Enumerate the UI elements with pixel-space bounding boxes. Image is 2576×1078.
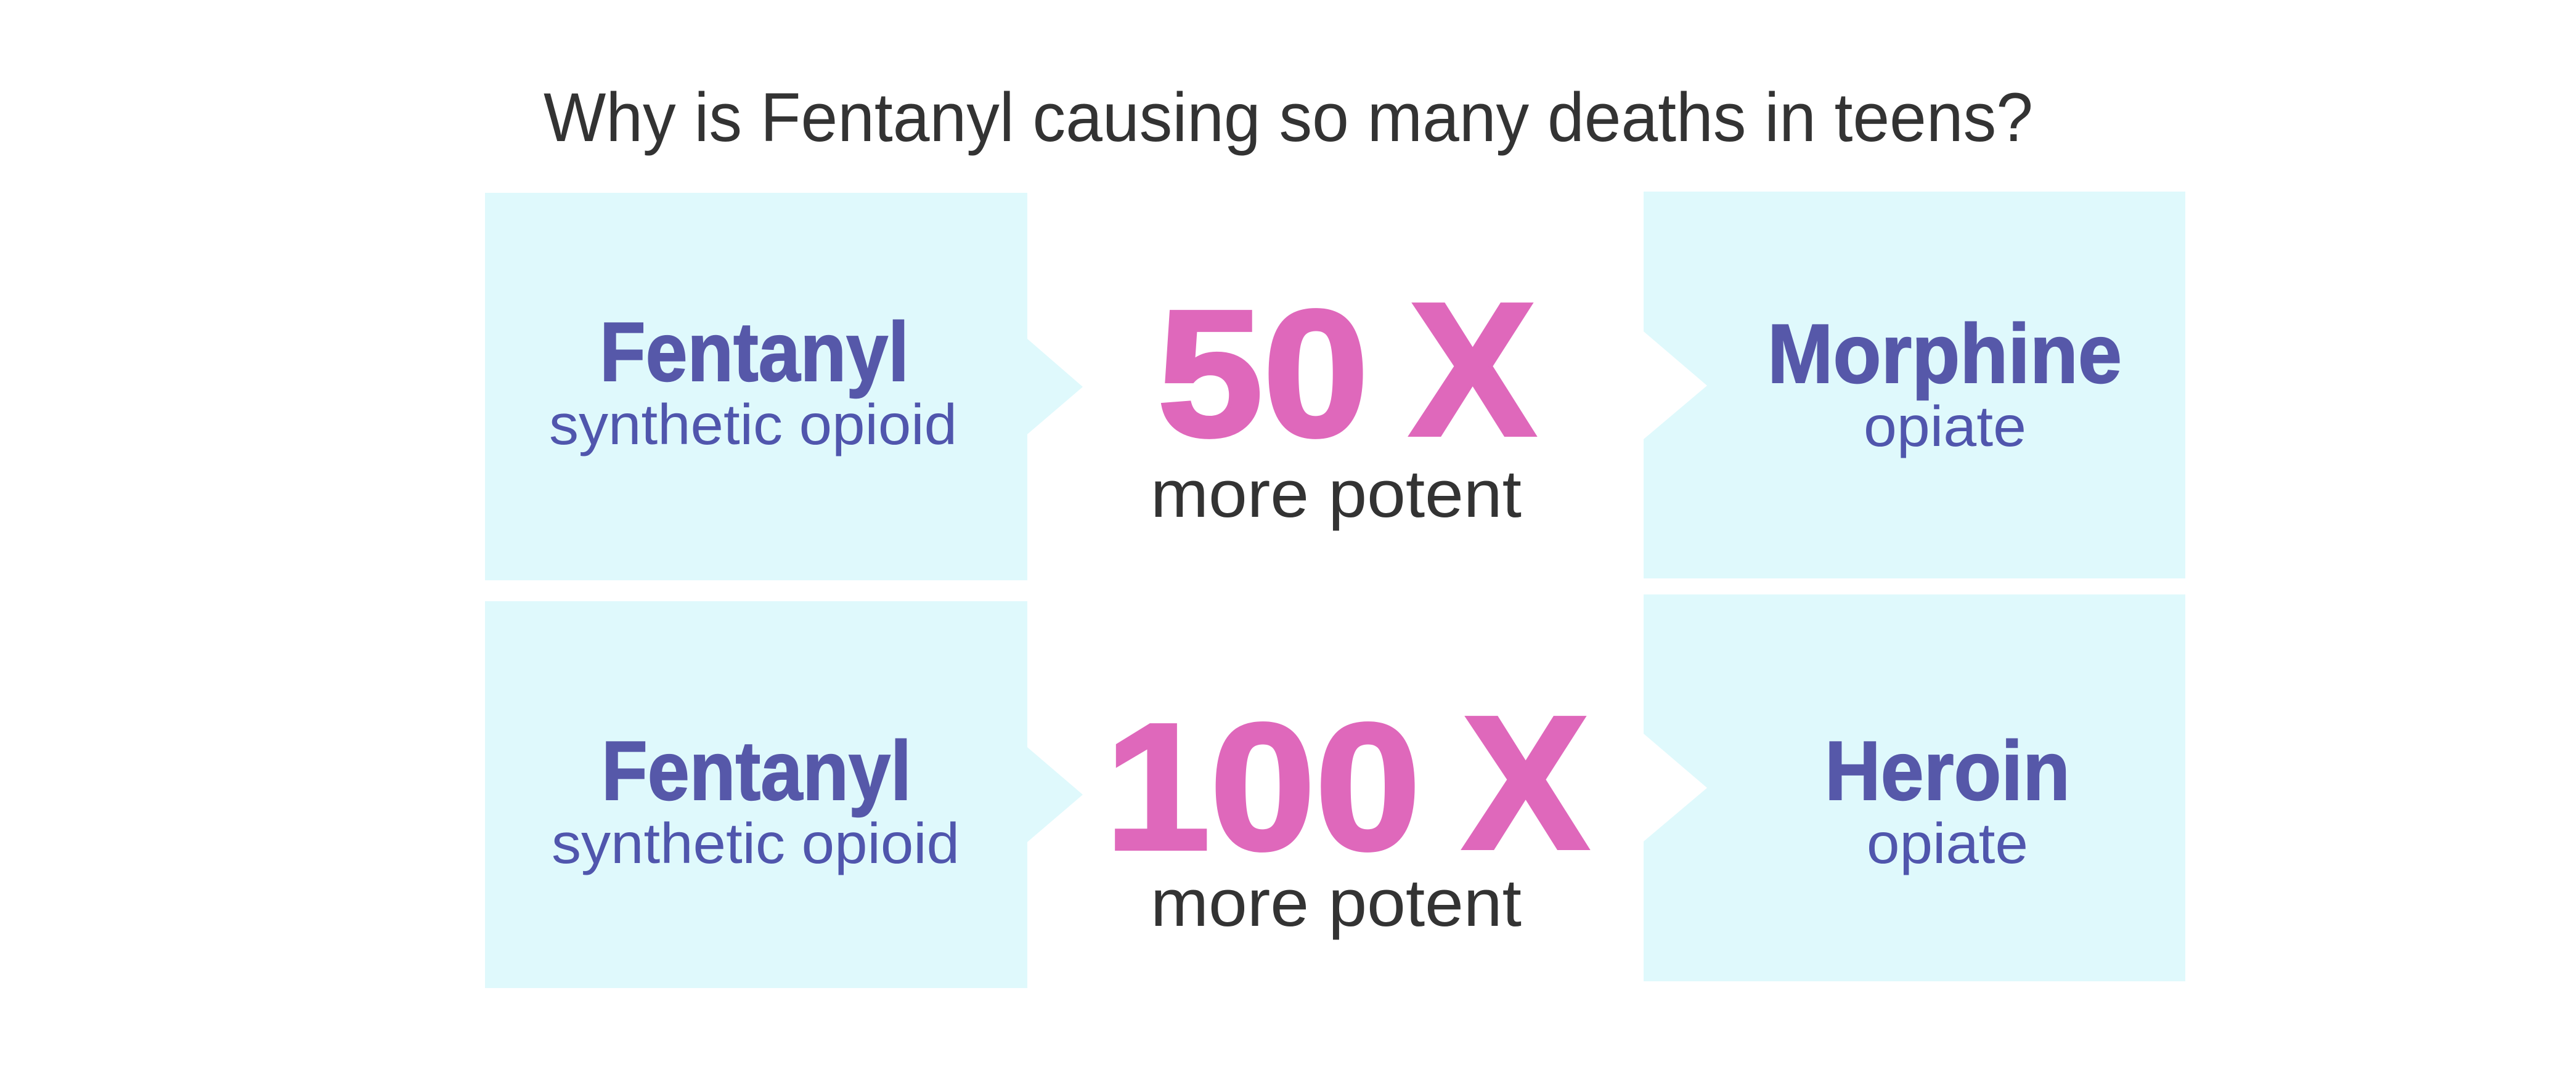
caption: more potent (row 2): more potent [1151, 865, 1522, 941]
multiplier: 50 X: 50 [1157, 273, 1369, 474]
multiplier: 100 X: X [1462, 677, 1589, 889]
panel: fentanyl vs heroin, left box [485, 601, 1083, 988]
label: opiate (heroin): opiate [1867, 811, 2028, 875]
panel: morphine box [1644, 192, 2185, 578]
multiplier: 100 X [1105, 677, 1589, 889]
panel: heroin box [1644, 594, 2185, 981]
multiplier: 100 X: 100 [1105, 686, 1420, 887]
label: Morphine: Morphine [1767, 307, 2122, 400]
caption: more potent (row 1): more potent [1151, 456, 1522, 532]
label: synthetic opioid (row 2): synthetic opioid [552, 811, 960, 875]
panel: fentanyl vs morphine, left box [485, 193, 1083, 580]
label: Fentanyl (row 2): Fentanyl [601, 724, 911, 817]
multiplier: 50 X [1157, 264, 1536, 476]
title: Why is Fentanyl causing so many deaths in teens? [544, 79, 2033, 156]
label: synthetic opioid: synthetic opioid [549, 392, 957, 456]
multiplier: 50 X: X [1409, 264, 1536, 476]
label: opiate (morphine): opiate [1864, 394, 2026, 458]
label: Heroin: Heroin [1825, 724, 2070, 817]
label: Fentanyl: Fentanyl [600, 305, 909, 399]
